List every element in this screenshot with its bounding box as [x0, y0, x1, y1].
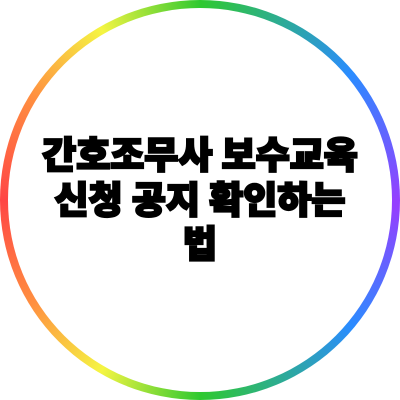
title: 법: [183, 224, 217, 265]
title: 간호조무사 보수교육: [42, 135, 358, 176]
title: [41, 135, 358, 265]
title: 신청 공지 확인하는: [55, 180, 345, 221]
